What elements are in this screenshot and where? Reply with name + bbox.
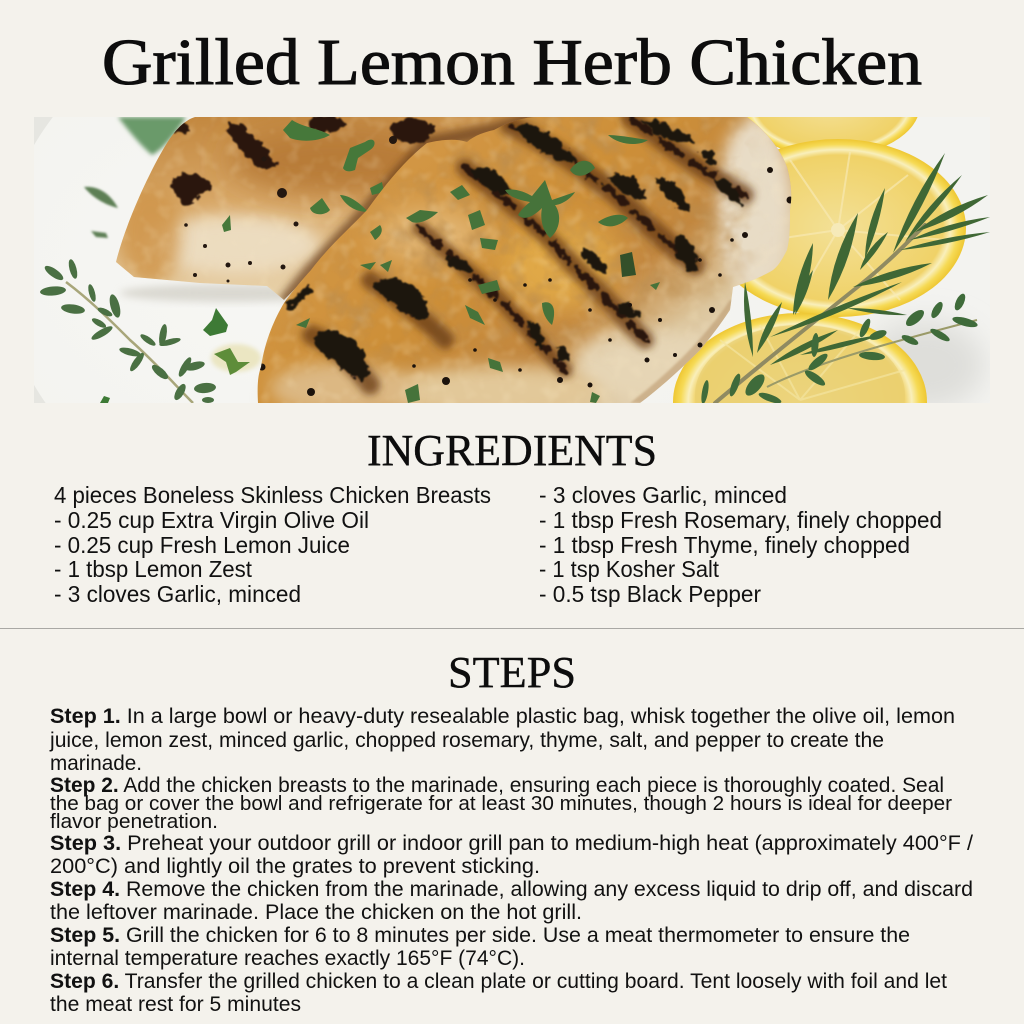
ingredients right column	[539, 482, 942, 607]
step 5: Step 5. Grill the chicken for 6 to 8 minutes per side. Use a meat thermometer to ensure the	[50, 924, 910, 947]
back chicken breast	[116, 117, 534, 300]
grill marks	[285, 118, 745, 380]
ingredients right column: - 0.5 tsp Black Pepper	[539, 581, 761, 607]
step 2: the bag or cover the bowl and refrigerate for at least 30 minutes, though 2 hours is ideal for deeper	[50, 793, 952, 815]
step 1: juice, lemon zest, minced garlic, chopped rosemary, thyme, salt, and pepper to create the	[49, 729, 884, 752]
scattered herbs on plate	[84, 187, 228, 403]
thyme sprig on plate	[40, 258, 216, 403]
step 6: Step 6. Transfer the grilled chicken to a clean plate or cutting board. Tent loosely with foil and let	[50, 970, 947, 993]
heading: steps: STEPS	[448, 648, 576, 697]
step 1: Step 1. In a large bowl or heavy-duty resealable plastic bag, whisk together the olive oil, lemon	[50, 705, 955, 728]
step 1	[49, 705, 955, 775]
plate	[34, 117, 900, 403]
step 5	[50, 924, 910, 970]
ingredients left column: 4 pieces Boneless Skinless Chicken Breasts	[54, 482, 491, 508]
ingredients left column	[54, 482, 491, 607]
ingredients left column: - 0.25 cup Fresh Lemon Juice	[54, 532, 350, 558]
step 3: 200°C) and lightly oil the grates to prevent sticking.	[50, 855, 540, 878]
step 4: Step 4. Remove the chicken from the marinade, allowing any excess liquid to drip off, and discard	[50, 878, 973, 901]
plate shadow under chickens	[120, 284, 340, 302]
ingredients right column: - 1 tbsp Fresh Thyme, finely chopped	[539, 532, 910, 558]
ingredients left column: - 3 cloves Garlic, minced	[54, 581, 301, 607]
background herb leaf	[118, 117, 186, 155]
heading: ingredients: INGREDIENTS	[367, 426, 657, 475]
ingredients right column: - 3 cloves Garlic, minced	[539, 482, 787, 508]
step 1: marinade.	[50, 752, 142, 775]
title: Grilled Lemon Herb Chicken	[102, 26, 922, 99]
steps text block	[49, 705, 973, 1016]
step 6	[50, 970, 947, 1016]
step 3	[50, 832, 973, 878]
main chicken breast	[250, 110, 800, 418]
rosemary sprig	[715, 153, 990, 403]
step 5: internal temperature reaches exactly 165°F (74°C).	[50, 947, 525, 970]
step 4	[50, 878, 973, 924]
step 6: the meat rest for 5 minutes	[50, 993, 301, 1016]
herbs on back chicken	[222, 120, 384, 232]
thyme sprig on lemon	[700, 292, 979, 405]
ingredients left column: - 1 tbsp Lemon Zest	[54, 556, 253, 582]
ingredients left column: - 0.25 cup Extra Virgin Olive Oil	[54, 507, 369, 533]
lemon slices	[673, 117, 966, 403]
chopped herbs on main chicken	[296, 135, 660, 403]
photo: grilled chicken on a plate with lemon and herbs	[34, 117, 990, 403]
ingredients right column: - 1 tsp Kosher Salt	[539, 556, 720, 582]
pepper specks	[258, 167, 794, 396]
ingredients right column: - 1 tbsp Fresh Rosemary, finely chopped	[539, 507, 942, 533]
grill mark shading	[312, 118, 745, 385]
step 2	[50, 774, 952, 833]
step 4: the leftover marinade. Place the chicken on the hot grill.	[50, 901, 582, 924]
olive oil drizzle	[211, 344, 261, 375]
shadow cast by main chicken	[284, 117, 534, 303]
step 3: Step 3. Preheat your outdoor grill or indoor grill pan to medium-high heat (approximately 400°F /	[50, 832, 973, 855]
step 2: flavor penetration.	[50, 811, 218, 833]
step 2: Step 2. Add the chicken breasts to the marinade, ensuring each piece is thoroughly coated. Seal	[50, 774, 944, 797]
